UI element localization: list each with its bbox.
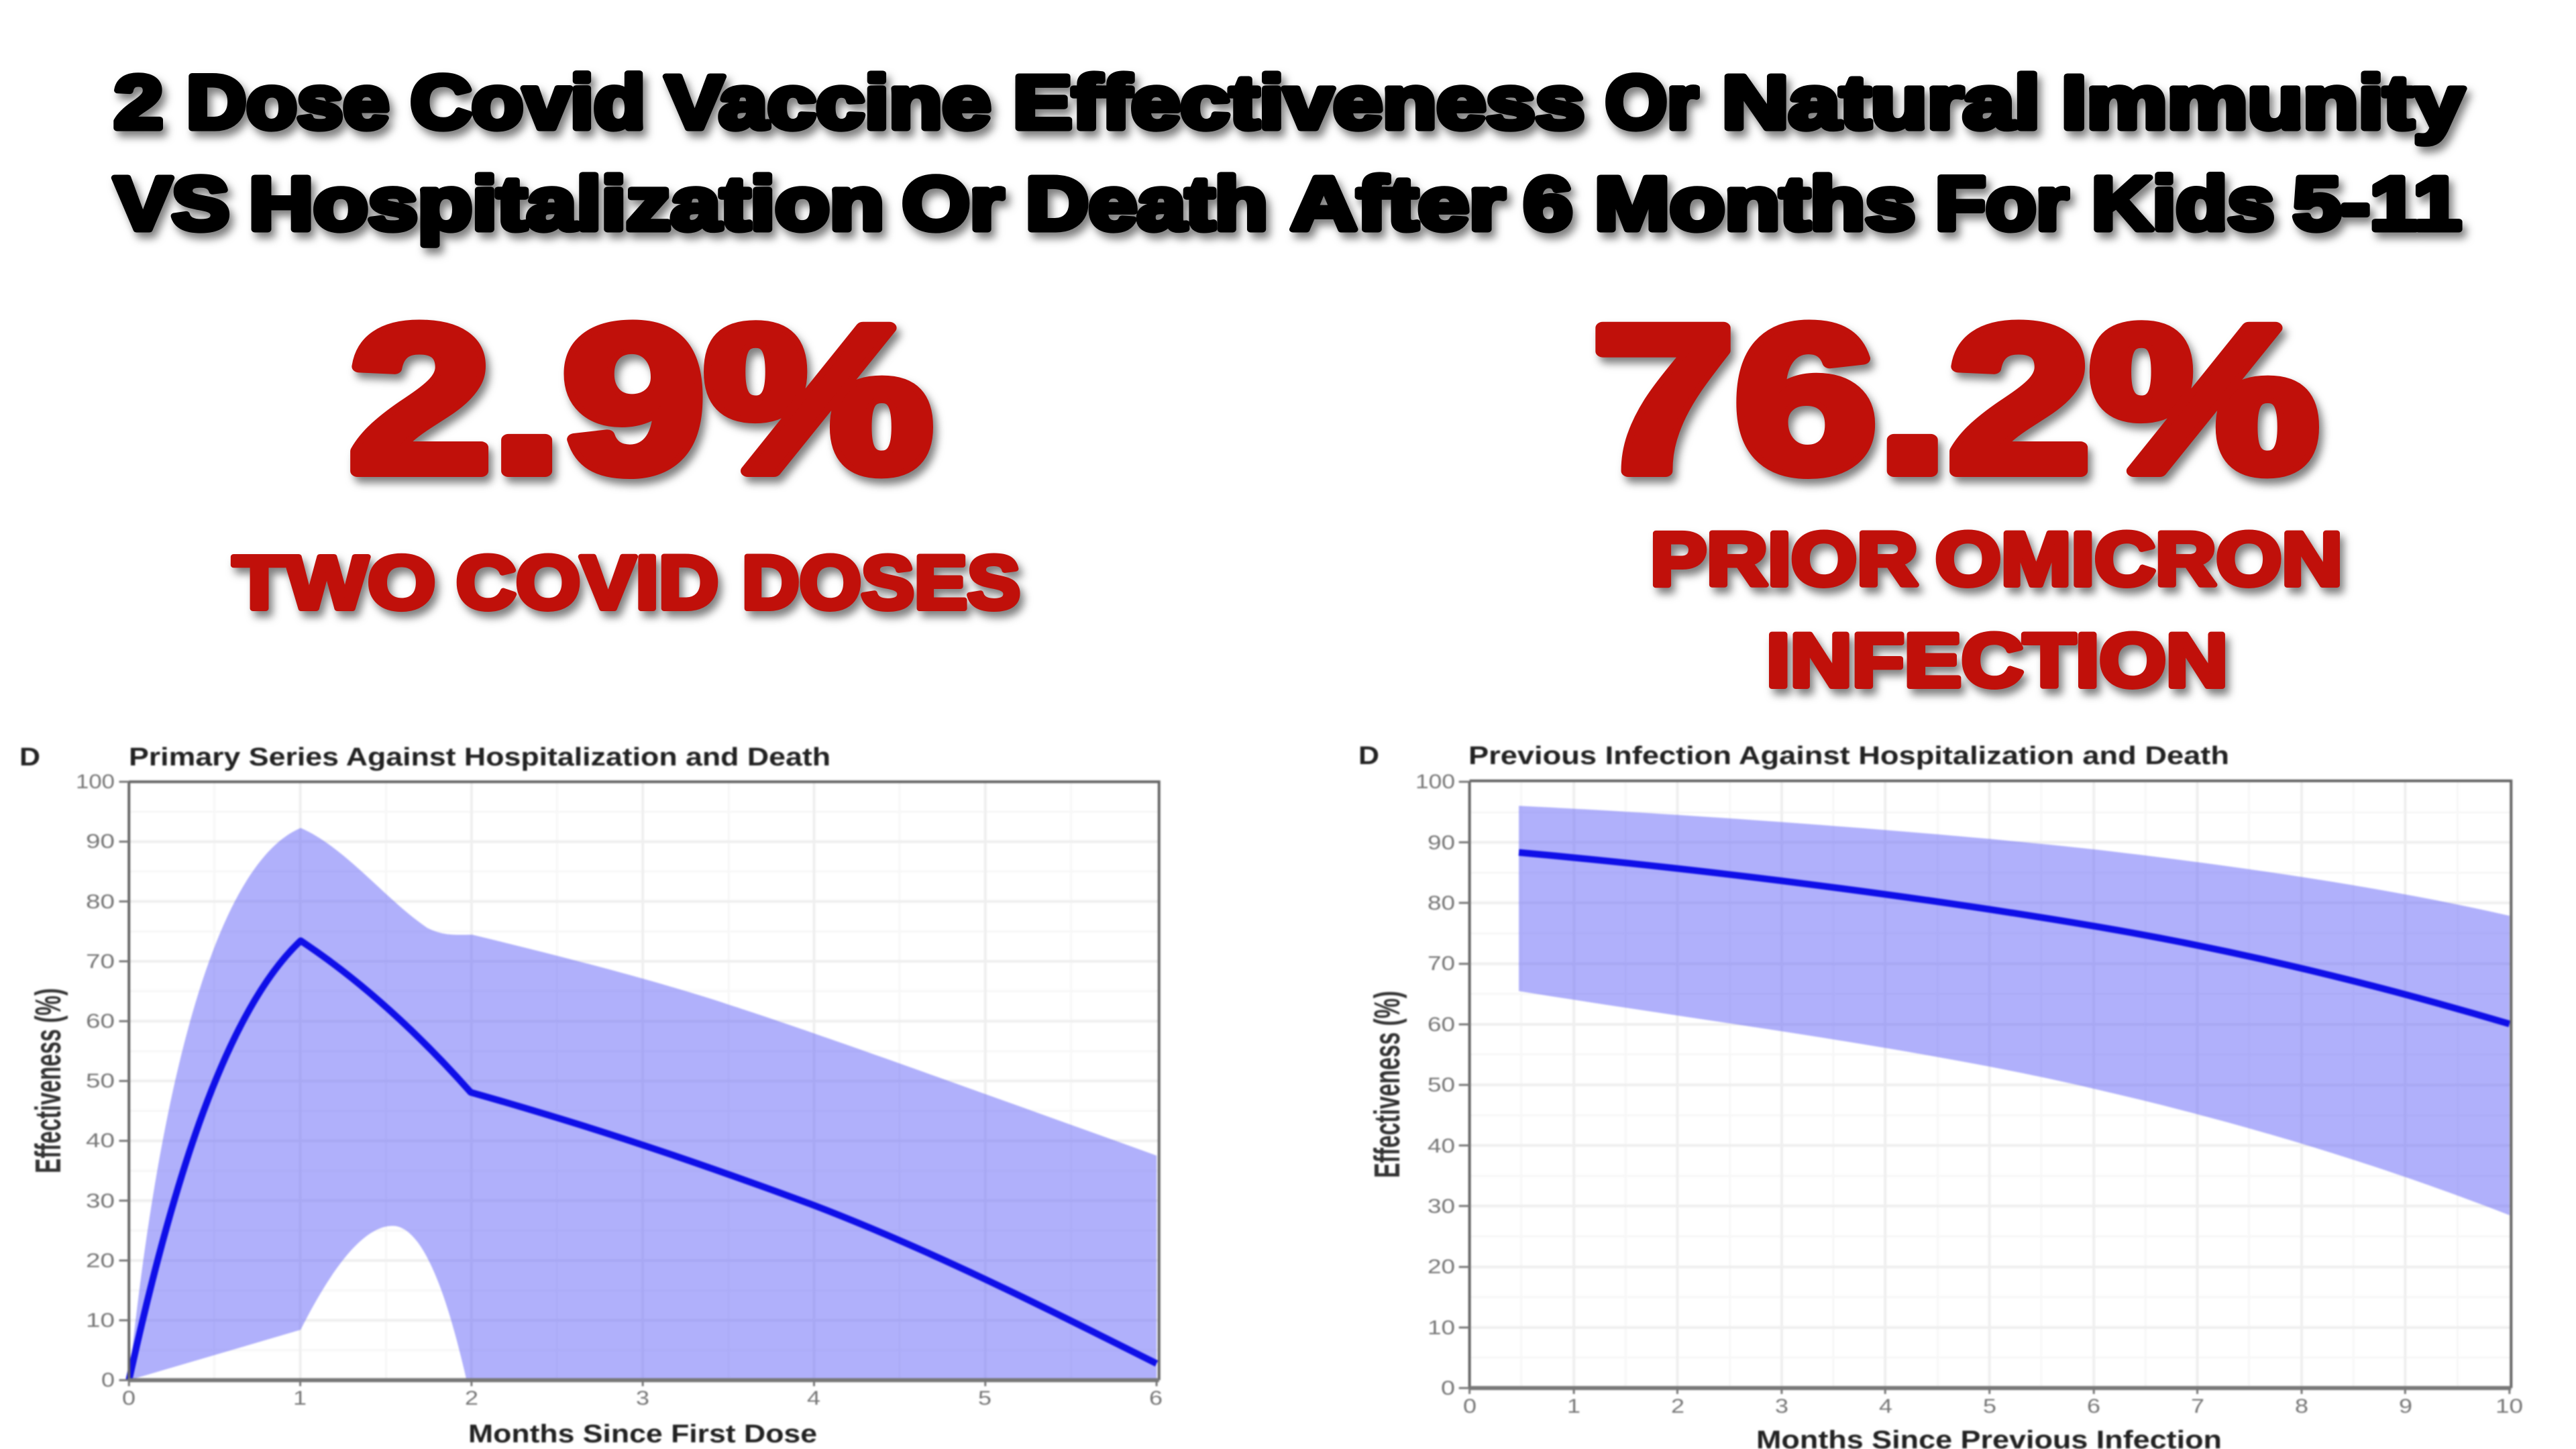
- y axis labels left: 0: [101, 1369, 115, 1391]
- y axis labels left: 30: [86, 1190, 115, 1212]
- x axis labels left: [122, 1387, 1163, 1409]
- y axis labels right: 40: [1428, 1135, 1455, 1157]
- title: Or: [1605, 60, 1698, 144]
- x axis title left: Months Since First Dose: [468, 1420, 817, 1448]
- y axis title left: Effectiveness (%): [28, 988, 68, 1173]
- y axis labels right: 70: [1428, 953, 1455, 975]
- x axis labels right: 0: [1463, 1395, 1477, 1417]
- panel letter right: D: [1358, 742, 1379, 770]
- stat label: two covid doses: [233, 541, 1020, 625]
- y axis labels right: 50: [1428, 1074, 1455, 1096]
- x axis labels left: 0: [122, 1387, 136, 1409]
- x axis labels right: 8: [2295, 1395, 2308, 1417]
- y axis labels right: 60: [1428, 1014, 1455, 1036]
- y axis labels right: 100: [1415, 771, 1455, 793]
- y axis labels right: 30: [1428, 1195, 1455, 1218]
- title: Death: [1026, 162, 1268, 246]
- y axis labels right: 80: [1428, 892, 1455, 914]
- confidence band right: [1519, 806, 2510, 1215]
- stat label: two covid doses: COVID: [456, 541, 718, 625]
- title: Covid: [411, 60, 645, 144]
- x axis labels right: 9: [2399, 1395, 2412, 1417]
- title: After: [1291, 162, 1505, 246]
- stat label: two covid doses: DOSES: [742, 541, 1020, 625]
- title: [114, 60, 2464, 246]
- x axis labels right: 6: [2087, 1395, 2100, 1417]
- stat: prior infection 76.2%: 76.2%: [1592, 282, 2318, 515]
- y axis labels left: 80: [86, 891, 115, 913]
- x axis labels left: 4: [807, 1387, 820, 1409]
- title: VS: [114, 162, 229, 246]
- x axis labels right: [1463, 1395, 2523, 1417]
- y axis labels left: 40: [86, 1130, 115, 1152]
- chart heading left: Primary Series Against Hospitalization and Death: [129, 743, 830, 771]
- y axis labels left: 50: [86, 1070, 115, 1092]
- title: Kids: [2092, 162, 2274, 246]
- title: Months: [1595, 162, 1915, 246]
- y axis labels right: 0: [1441, 1377, 1455, 1399]
- title: Immunity: [2061, 60, 2464, 144]
- panel letter left: D: [19, 743, 40, 771]
- title: 2: [114, 60, 163, 144]
- x axis labels right: 2: [1671, 1395, 1684, 1417]
- title: Hospitalization: [249, 162, 884, 246]
- title: Dose: [186, 60, 389, 144]
- stat label: two covid doses: TWO: [233, 541, 435, 625]
- effectiveness line right: [1519, 853, 2510, 1024]
- y axis labels right: [1415, 771, 1455, 1399]
- x axis labels right: 7: [2191, 1395, 2204, 1417]
- stat label: prior omicron infection: [1650, 517, 2343, 702]
- title: Natural: [1722, 60, 2040, 144]
- y axis labels left: 10: [86, 1309, 115, 1332]
- y axis labels left: 90: [86, 830, 115, 853]
- chart: primary series against hospitalization and death: [19, 743, 1163, 1448]
- y axis labels right: 90: [1428, 832, 1455, 854]
- y axis labels right: 20: [1428, 1256, 1455, 1278]
- stat label: prior omicron infection: PRIOR: [1650, 517, 1918, 601]
- x axis labels right: 10: [2496, 1395, 2523, 1417]
- x axis labels right: 4: [1879, 1395, 1892, 1417]
- title: Vaccine: [665, 60, 991, 144]
- y axis labels left: 70: [86, 951, 115, 973]
- x axis labels left: 1: [293, 1387, 307, 1409]
- y axis labels left: 100: [76, 771, 115, 793]
- y axis labels left: 60: [86, 1010, 115, 1032]
- stat label: prior omicron infection: INFECTION: [1766, 619, 2228, 702]
- x axis labels right: 5: [1983, 1395, 1996, 1417]
- x axis labels left: 6: [1149, 1387, 1163, 1409]
- confidence band left: [129, 828, 1157, 1380]
- y axis labels left: [76, 771, 115, 1391]
- title: For: [1935, 162, 2068, 246]
- plot area right: [1459, 781, 2511, 1394]
- title: Effectiveness: [1013, 60, 1585, 144]
- x axis labels left: 5: [978, 1387, 991, 1409]
- stat label: prior omicron infection: OMICRON: [1935, 517, 2343, 601]
- y axis title right: Effectiveness (%): [1367, 991, 1407, 1178]
- y axis labels left: 20: [86, 1250, 115, 1272]
- x axis labels left: 3: [636, 1387, 649, 1409]
- stat: two doses 2.9%: 2.9%: [349, 282, 932, 515]
- title: Or: [902, 162, 1004, 246]
- plot area left: [119, 782, 1159, 1386]
- chart: previous infection against hospitalization and death: [1358, 742, 2523, 1449]
- title: 6: [1523, 162, 1572, 246]
- y axis labels right: 10: [1428, 1317, 1455, 1339]
- x axis labels right: 3: [1775, 1395, 1788, 1417]
- effectiveness line left: [129, 941, 1157, 1380]
- x axis labels right: 1: [1567, 1395, 1580, 1417]
- x axis labels left: 2: [465, 1387, 478, 1409]
- chart heading right: Previous Infection Against Hospitalization and Death: [1468, 742, 2229, 770]
- title: 5-11: [2293, 162, 2461, 246]
